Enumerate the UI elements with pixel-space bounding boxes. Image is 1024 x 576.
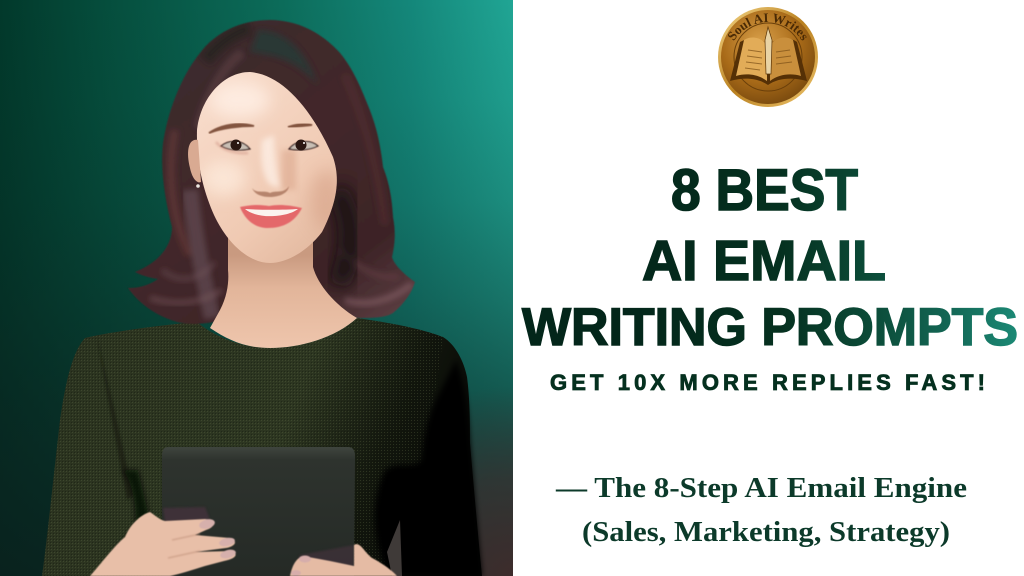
- title line 2: AI EMAIL: [642, 229, 886, 293]
- ear: [188, 140, 201, 182]
- subtitle: GET 10X MORE REPLIES FAST!: [550, 370, 985, 395]
- eyes: [221, 141, 250, 150]
- tagline: [555, 473, 967, 548]
- mouth: [240, 205, 302, 228]
- tagline line 1: — The 8-Step AI Email Engine: [555, 473, 967, 504]
- tablet: [162, 447, 355, 576]
- woman portrait: [42, 20, 482, 576]
- dress: [42, 318, 482, 576]
- icon: open book: [730, 38, 807, 85]
- title: [522, 158, 1018, 357]
- eyebrows: [209, 124, 254, 133]
- face: [188, 72, 342, 263]
- icon: pen: [765, 27, 772, 74]
- tagline line 2: (Sales, Marketing, Strategy): [582, 517, 950, 548]
- left hand holding tablet: [90, 512, 237, 576]
- hair: [128, 20, 415, 324]
- neck and chest: [210, 235, 357, 348]
- panel background gradient: [0, 0, 513, 576]
- title line 3: WRITING PROMPTS: [522, 298, 1018, 357]
- logo: gold coin: [718, 7, 818, 107]
- coin text: Soul AI Writes: [728, 13, 807, 40]
- left photo panel: [0, 0, 513, 576]
- title line 1: 8 BEST: [671, 158, 858, 223]
- gap between arm and torso: [387, 520, 402, 576]
- nose: [252, 186, 289, 197]
- right hand holding tablet: [290, 544, 397, 576]
